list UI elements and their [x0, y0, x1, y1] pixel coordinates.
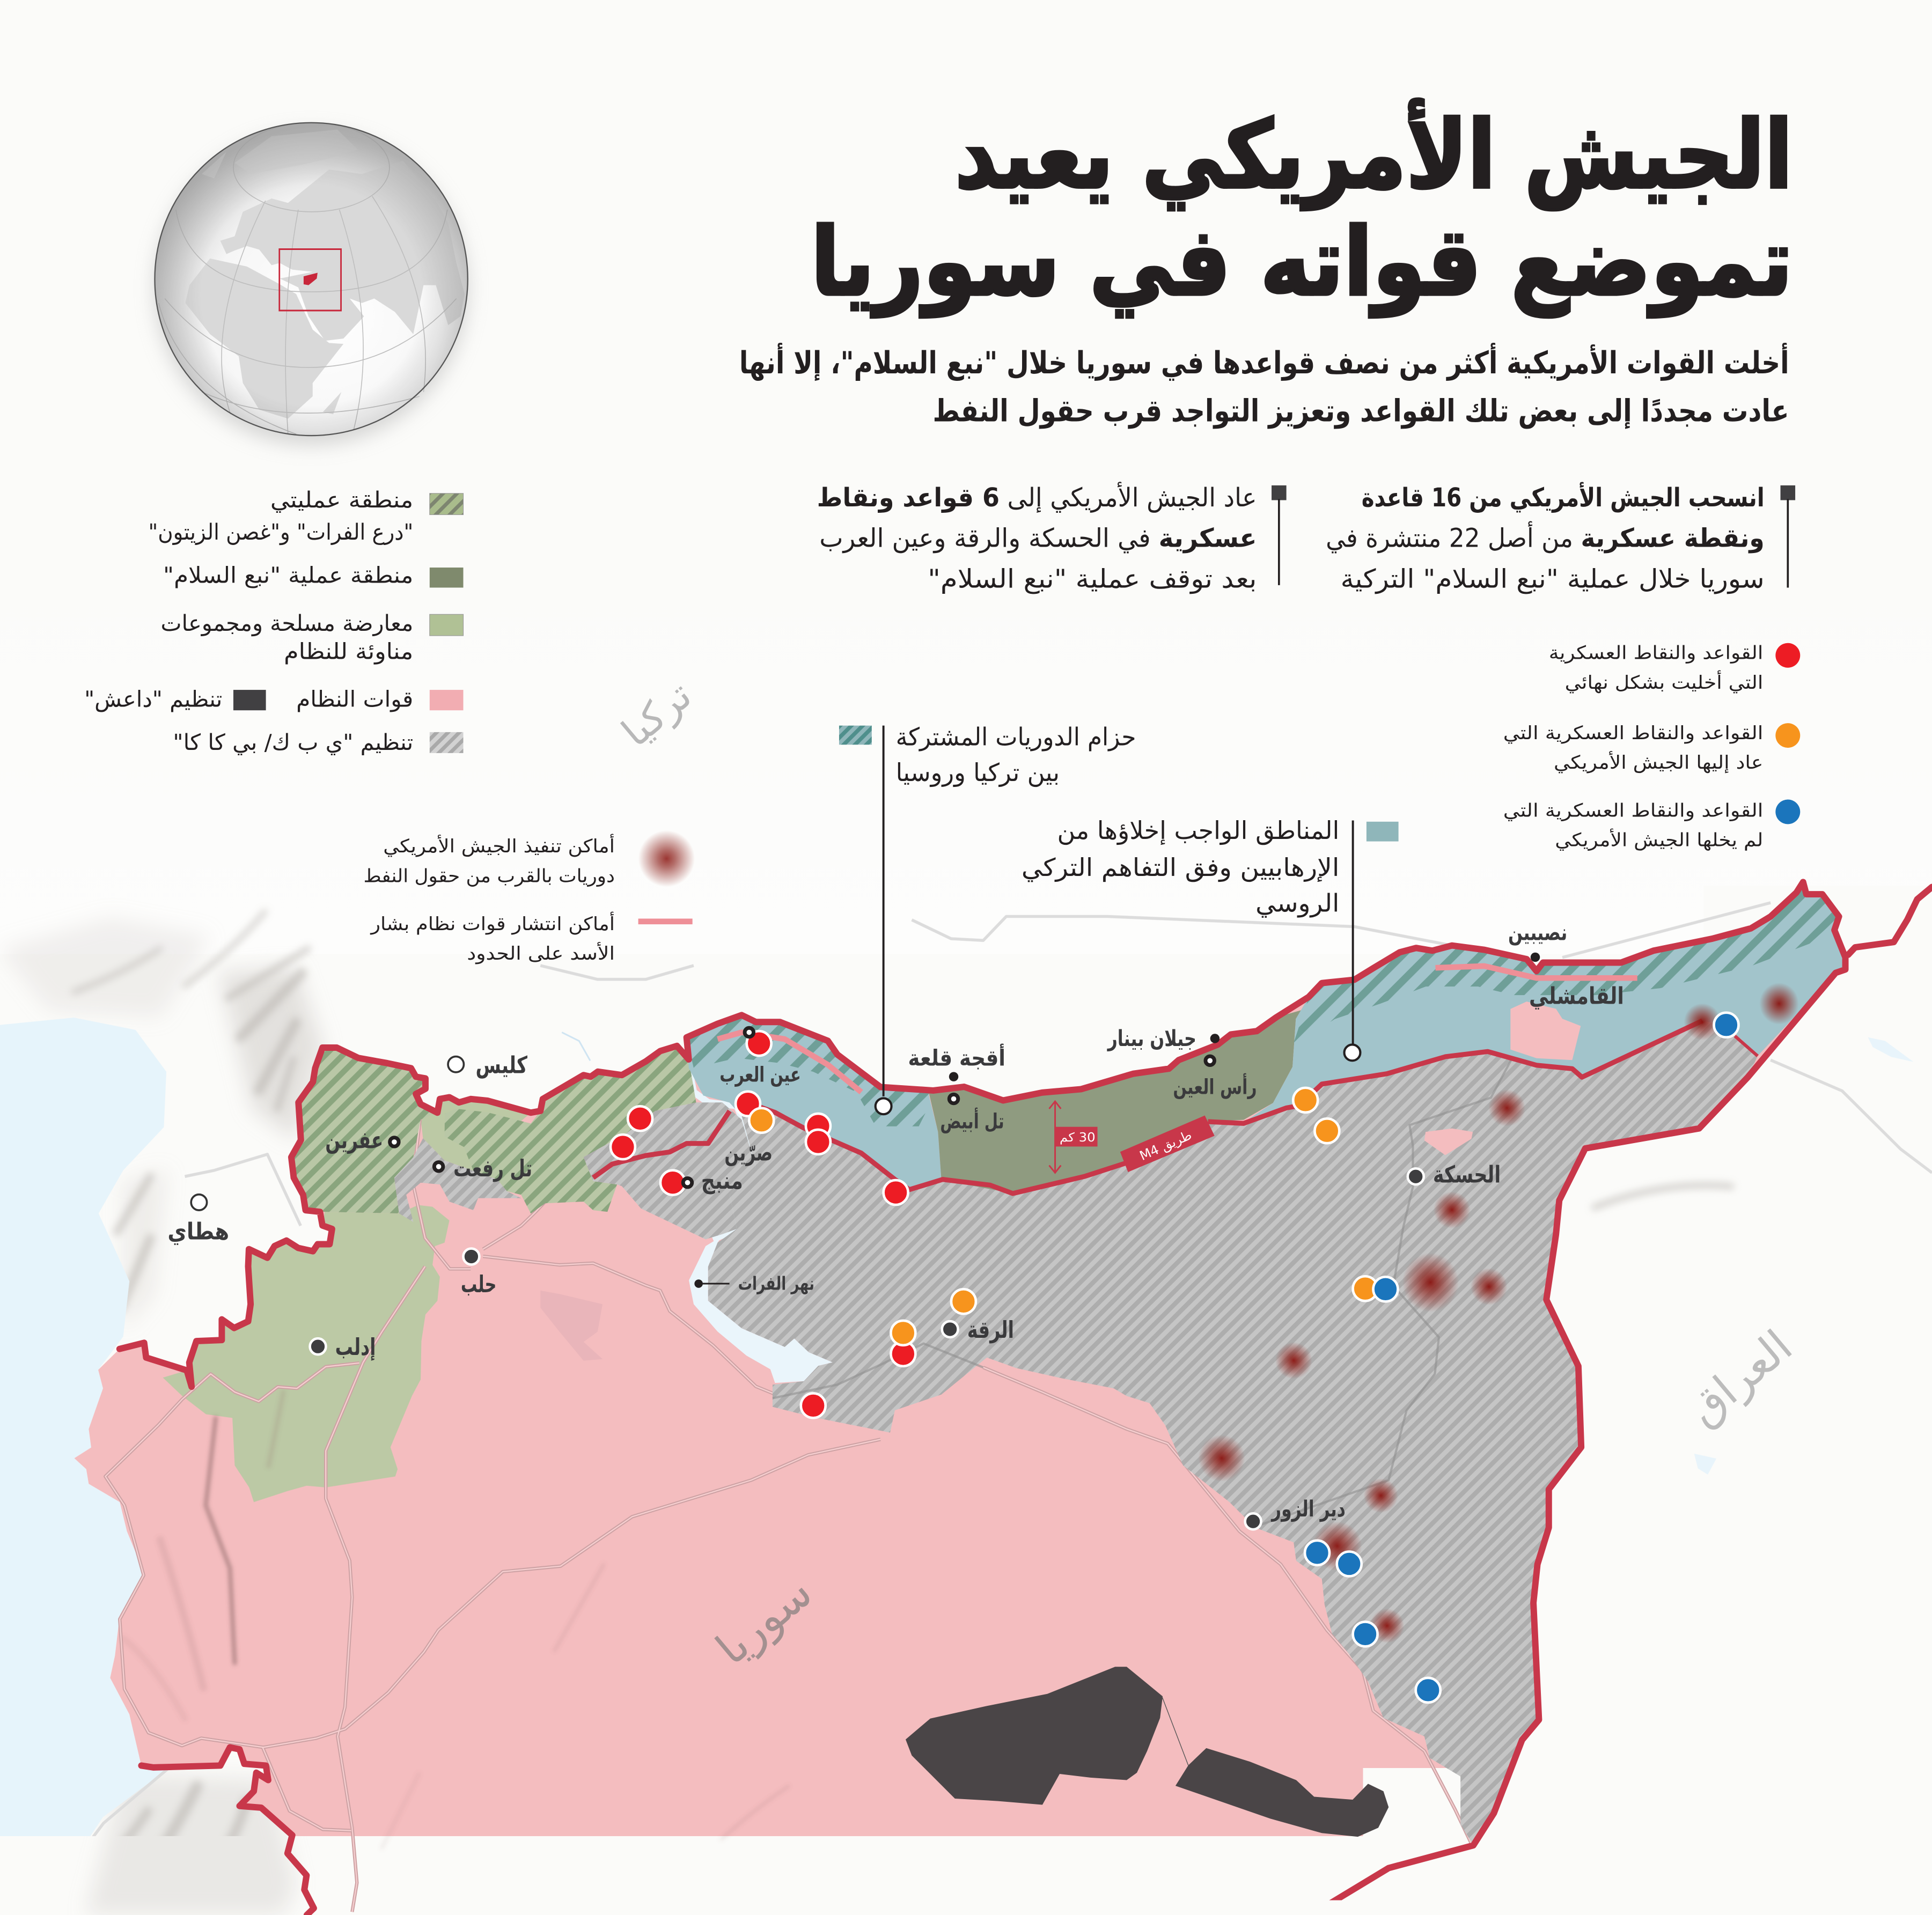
- label: Tal Abyad: تل أبيض: [940, 1108, 1004, 1134]
- legend: base status key: [1503, 643, 1800, 851]
- map: opposition strip north of Tal Rifaat: [421, 1098, 531, 1171]
- legend item: ISIS: تنظيم "داعش": [84, 687, 222, 712]
- map: Euphrates lake and river: [689, 1068, 833, 1383]
- text block: withdrawal: ونقطة عسكرية من أصل 22 منتشرة في: [1326, 521, 1765, 554]
- label: Sarrin: صرّين: [724, 1139, 773, 1166]
- text block: return: [817, 481, 1287, 594]
- legend item: opposition: [160, 610, 464, 665]
- label: Ain al-Arab: عين العرب: [719, 1063, 801, 1087]
- title: تموضع قواته في سوريا: [811, 208, 1793, 318]
- map: regime pocket Hasakah: [1424, 1129, 1473, 1155]
- markers: major cities: [310, 1168, 1424, 1529]
- map: SDF area Manbij: [584, 1102, 756, 1239]
- label: Nusaybin: نصيبين: [1508, 919, 1567, 946]
- depth marker: 30 km: [1049, 1101, 1098, 1173]
- label: Tal Rifaat: تل رفعت: [453, 1155, 532, 1182]
- legend item: returned bases: القواعد والنقاط العسكرية التي: [1503, 723, 1763, 744]
- callout: zones to be cleared: الروسي: [1255, 888, 1339, 918]
- legend item: retained bases: لم يخلها الجيش الأمريكي: [1555, 829, 1763, 851]
- markers: small black dots: [694, 953, 1540, 1288]
- map: regime pocket Qamishli: [1510, 1001, 1581, 1060]
- legend item: returned bases: عاد إليها الجيش الأمريكي: [1554, 751, 1763, 774]
- map: ISIS area large: [906, 1667, 1163, 1804]
- map: regime deployment lines (pink): [718, 966, 1637, 1092]
- label: Qamishli: القامشلي: [1529, 983, 1624, 1010]
- map: roads over SDF area: [773, 1001, 1526, 1528]
- legend item: opposition: معارضة مسلحة ومجموعات: [160, 610, 413, 636]
- map: safe zone Kobani (teal): [687, 1015, 942, 1190]
- label: Hatay: هطاي: [167, 1218, 229, 1245]
- label: Deir ez-Zor: دير الزور: [1271, 1496, 1346, 1522]
- country label: Syria: سوريا: [707, 1566, 822, 1675]
- markers: orange bases returned to: [749, 1088, 1378, 1345]
- footer rule: [188, 1810, 1818, 1811]
- map: joint patrol belt east (hatched): [1292, 882, 1839, 1047]
- text block: return: عسكرية في الحسكة والرقة وعين العرب: [819, 524, 1257, 554]
- label: Ceylanpinar: جيلان بينار: [1107, 1026, 1196, 1051]
- map: roads: [105, 1118, 1471, 1912]
- map: opposition area Idlib: [163, 1205, 450, 1502]
- legend item: oil field patrols: دوريات بالقرب من حقول النفط: [363, 865, 615, 887]
- markers: red bases fully evacuated: [611, 1031, 915, 1418]
- legend item: evacuated bases: القواعد والنقاط العسكرية: [1549, 643, 1763, 664]
- legend item: opposition: مناوئة للنظام: [284, 639, 413, 665]
- legend: left area key: [84, 487, 464, 756]
- icon: north arrow: [1708, 1516, 1754, 1612]
- label: Afrin: عفرين: [325, 1127, 383, 1154]
- callout: zones to be cleared: المناطق الواجب إخلاؤها من: [1057, 816, 1339, 845]
- label: Hasakah: الحسكة: [1433, 1162, 1501, 1189]
- legend item: Peace Spring zone: منطقة عملية "نبع السلام": [163, 562, 413, 588]
- legend item: evacuated bases: التي أخليت بشكل نهائي: [1565, 670, 1763, 694]
- label: Akcakale: أقجة قلعة: [908, 1044, 1005, 1071]
- legend item: evacuated bases: [1549, 643, 1800, 694]
- logo: Anadolu Agency: AA: [115, 1811, 170, 1854]
- markers: oil field patrol glows: [1198, 983, 1799, 1643]
- legend item: YPG/PKK: تنظيم "ي ب ك/ بي كا كا": [173, 730, 413, 756]
- legend item: returned bases: [1503, 723, 1800, 774]
- legend item: regime deployment line: أماكن انتشار قوات نظام بشار: [370, 911, 615, 935]
- text block: withdrawal: [1326, 482, 1795, 594]
- map: ISIS area small: [1176, 1748, 1389, 1837]
- footer date: 10.11.2019: [1754, 1823, 1818, 1840]
- callout: joint patrol belt: حزام الدوريات المشتركة: [896, 722, 1136, 752]
- text block: withdrawal: سوريا خلال عملية "نبع السلام" التركية: [1341, 564, 1765, 594]
- label: Idlib: إدلب: [335, 1334, 376, 1361]
- map: joint patrol belt Kobani (hatched): [687, 1015, 933, 1126]
- map: Afrin operation zone (hatched): [291, 1048, 437, 1213]
- legend item: retained bases: [1503, 799, 1800, 851]
- markers: ring towns: [390, 1028, 1214, 1187]
- legend item: regime deployment line: [370, 911, 693, 964]
- footer agency name: وكالة الأناضول: [188, 1822, 285, 1842]
- scale bar: 60KM: [1700, 1634, 1764, 1664]
- callout: zones to be cleared: الإرهابيين وفق التفاهم التركي: [1022, 853, 1339, 882]
- legend item: regime forces: قوات النظام: [296, 687, 413, 712]
- label: Kilis: كليس: [475, 1052, 527, 1079]
- legend item: operation zones hatched: منطقة عمليتي: [270, 487, 413, 513]
- markers: open circles Turkey: [191, 1057, 464, 1210]
- markers: blue bases not evacuated: [1305, 1013, 1738, 1703]
- legend item: operation zones hatched: "درع الفرات" و"غصن الزيتون": [149, 519, 413, 545]
- map: regime-held territory: [74, 882, 1846, 1915]
- legend item: regime forces: [296, 687, 464, 712]
- text block: return: عاد الجيش الأمريكي إلى 6 قواعد ونقاط: [817, 481, 1257, 513]
- callout: zones to be cleared: [1022, 816, 1399, 1060]
- map: Syria state border: [120, 882, 1932, 1915]
- map: safe zone east (teal): [1244, 882, 1846, 1122]
- road sign: M4: طريق M4: [1137, 1128, 1194, 1163]
- map: base terrain and countries: [0, 903, 1932, 1915]
- callout: joint patrol belt: [839, 722, 1136, 1114]
- legend item: oil field patrols: أماكن تنفيذ الجيش الأمريكي: [383, 834, 615, 857]
- legend item: oil field patrols: [363, 830, 695, 887]
- text block: return: بعد توقف عملية "نبع السلام": [928, 564, 1257, 594]
- globe locator: [155, 123, 468, 445]
- text block: withdrawal: انسحب الجيش الأمريكي من 16 قاعدة: [1362, 482, 1765, 513]
- map: SDF area east of Euphrates: [708, 1021, 1758, 1845]
- legend item: regime deployment line: الأسد على الحدود: [467, 942, 615, 964]
- country label: Iraq: العراق: [1678, 1320, 1802, 1436]
- label: Aleppo: حلب: [461, 1271, 497, 1298]
- map: SDF area Tal Rifaat: [394, 1138, 521, 1222]
- road sign: M4: [1120, 1116, 1215, 1172]
- label: Manbij: منبج: [701, 1168, 743, 1195]
- map: Peace Spring operation zone (olive): [928, 1009, 1305, 1194]
- country label: Turkey: تركيا: [613, 673, 701, 756]
- subtitle: [739, 343, 1789, 429]
- legend item: operation zones hatched: [149, 487, 464, 545]
- depth marker: 30 km: 30 كم: [1060, 1131, 1096, 1145]
- map: Jabbul salt lake: [540, 1291, 603, 1361]
- scale bar: [1640, 1612, 1823, 1664]
- map: Euphrates Shield zone (hatched): [445, 1046, 696, 1213]
- map: inner control boundary (red line): [593, 1021, 1758, 1194]
- icon: north arrow: K: [1722, 1575, 1743, 1612]
- subtitle: عادت مجددًا إلى بعض تلك القواعد وتعزيز التواجد قرب حقول النفط: [932, 393, 1789, 429]
- label: Euphrates: نهر الفرات: [738, 1273, 814, 1294]
- label: Ras al-Ain: رأس العين: [1173, 1073, 1257, 1099]
- title: [811, 99, 1793, 318]
- callout: joint patrol belt: بين تركيا وروسيا: [896, 758, 1060, 787]
- map: ridges on land: [123, 1392, 789, 1914]
- title: الجيش الأمريكي يعيد: [955, 99, 1793, 210]
- legend item: retained bases: القواعد والنقاط العسكرية التي: [1503, 800, 1763, 822]
- label: Raqqa: الرقة: [967, 1317, 1014, 1344]
